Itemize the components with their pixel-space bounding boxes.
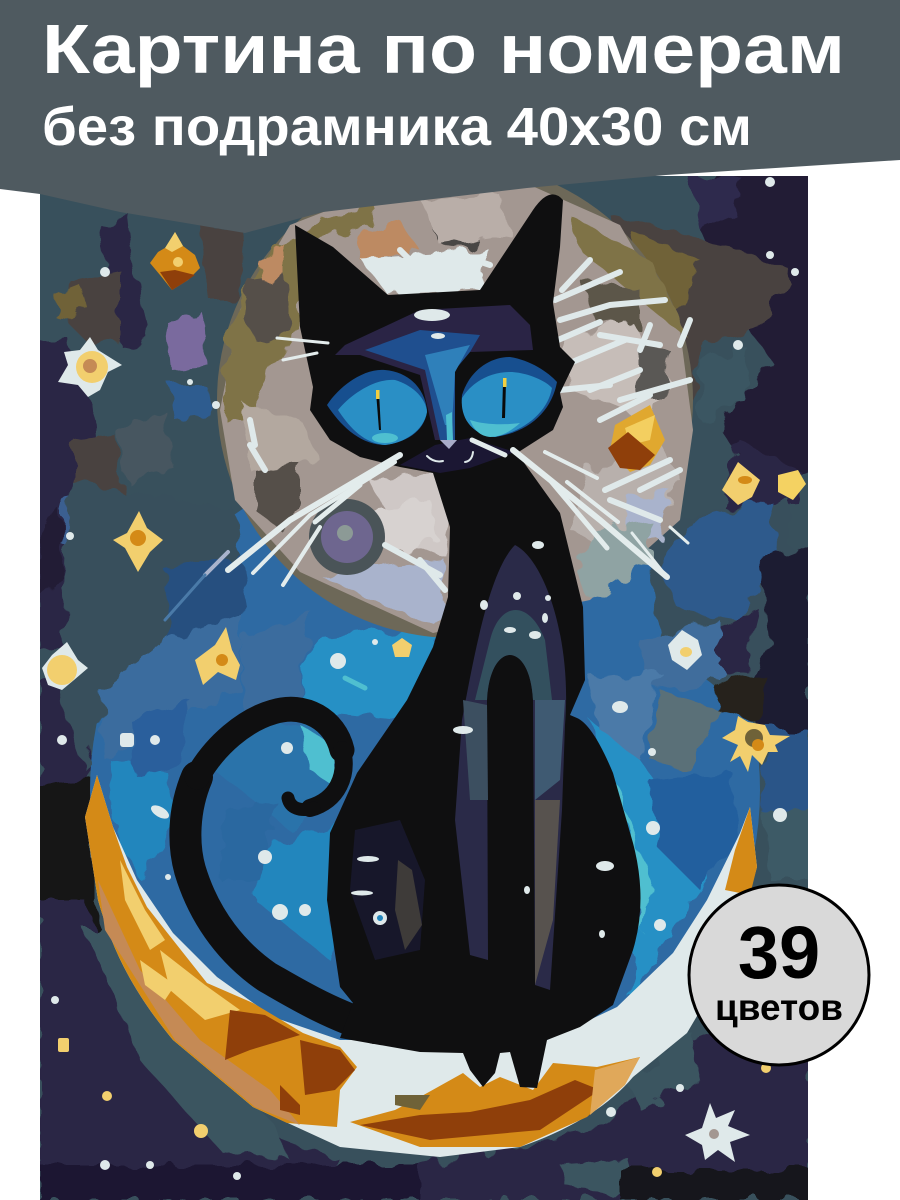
crescent orange right tip [725, 807, 757, 895]
crescent moon [85, 775, 757, 1157]
badge: 39 colours: 39 [738, 911, 820, 994]
star: sun yellow [722, 716, 790, 772]
painting [30, 160, 820, 1200]
blue sphere [60, 480, 808, 1040]
star: white upper left [58, 337, 122, 397]
moon ember [608, 405, 665, 472]
painting background [30, 160, 820, 1200]
white splashes [250, 250, 690, 590]
cat [165, 194, 688, 1088]
cat chest gaps [455, 545, 566, 990]
star: orange upper left [150, 232, 200, 290]
chest teal shading [475, 610, 552, 700]
cat whiskers [165, 338, 688, 620]
star: yellow centre left [195, 627, 240, 685]
chest dabs [351, 541, 614, 938]
cat muzzle [400, 438, 515, 473]
badge: 39 colours: цветов [715, 987, 843, 1028]
cat haunch markings [350, 820, 425, 960]
crescent orange bottom [350, 1057, 640, 1147]
header banner [0, 0, 900, 233]
cat tail [185, 709, 375, 1028]
teal streak [345, 678, 365, 688]
moon [217, 162, 693, 638]
star: yellow right pair [722, 462, 806, 505]
yellow dots [58, 1038, 771, 1177]
star: pale lower left [42, 642, 88, 690]
star: white right [668, 630, 702, 670]
cat smile [427, 452, 473, 462]
stars and paint dabs [42, 177, 806, 1180]
crescent orange left [85, 775, 357, 1127]
badge: 39 colours [689, 885, 869, 1065]
cat right eye [462, 357, 557, 437]
pentagon star [392, 638, 412, 657]
cat body and head [295, 194, 640, 1088]
white dots [51, 177, 799, 1180]
cat face [335, 305, 533, 440]
title: Картина по номерам [42, 10, 845, 88]
star: yellow left [113, 511, 163, 572]
cat nose [440, 440, 457, 449]
subtitle: без подрамника 40х30 см [42, 97, 752, 157]
cat left eye [327, 370, 427, 445]
cat forehead marks [414, 309, 450, 339]
star: white lower right [685, 1103, 750, 1162]
